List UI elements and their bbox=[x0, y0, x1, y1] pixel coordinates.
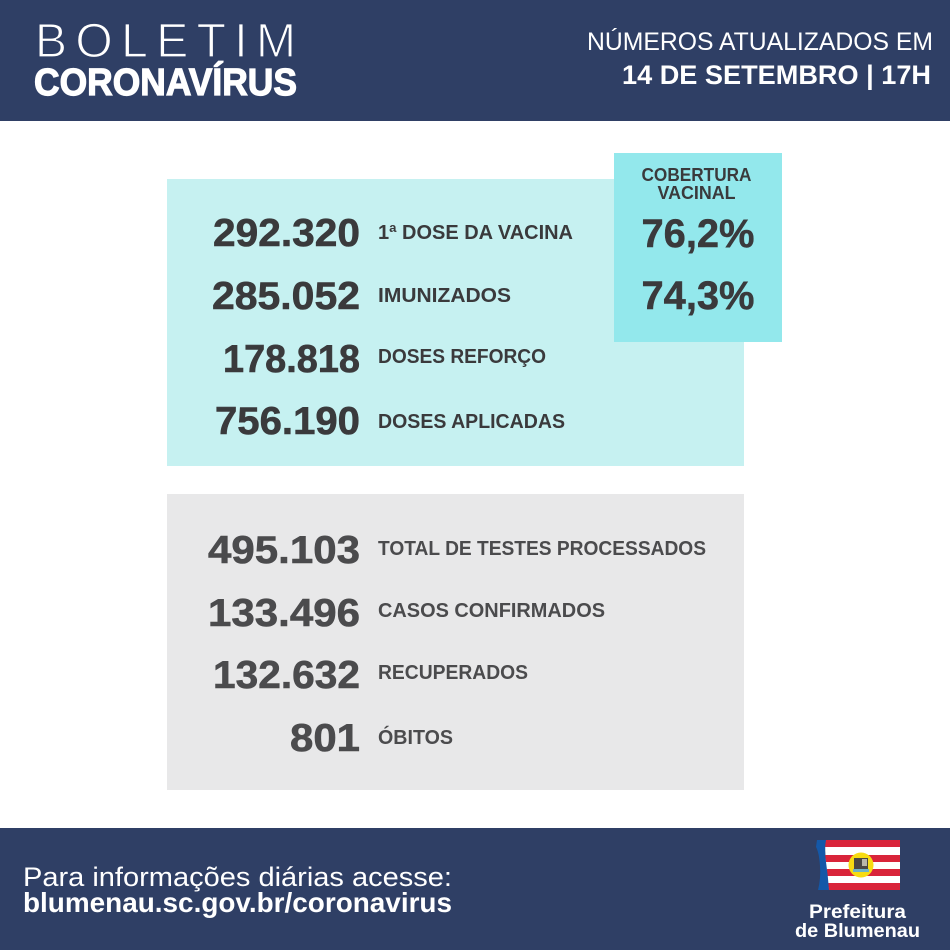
update notice: NÚMEROS ATUALIZADOS EM bbox=[587, 27, 933, 56]
stat: immunized: IMUNIZADOS bbox=[378, 285, 511, 307]
stat: booster doses bbox=[223, 338, 546, 381]
stat: deaths: ÓBITOS bbox=[378, 725, 453, 749]
stat: immunized bbox=[212, 275, 511, 318]
icon: Blumenau flag bbox=[816, 840, 900, 890]
update notice: 14 DE SETEMBRO | 17H bbox=[622, 60, 931, 90]
footer text: Para informações diárias acesse: bbox=[23, 862, 452, 892]
logo text: Prefeitura bbox=[809, 901, 906, 923]
stat: deaths: 801 bbox=[290, 717, 360, 760]
stat: deaths bbox=[290, 717, 453, 760]
coverage immunized: 74,3% bbox=[642, 274, 754, 318]
coverage first dose: 76,2% bbox=[642, 212, 754, 256]
coverage heading bbox=[642, 165, 752, 203]
stat: booster doses: DOSES REFORÇO bbox=[378, 346, 546, 368]
footer band bbox=[0, 828, 950, 950]
header band bbox=[0, 0, 950, 121]
footer text bbox=[23, 862, 452, 918]
stat: booster doses: 178.818 bbox=[223, 338, 360, 381]
stat: tests processed: TOTAL DE TESTES PROCESSADOS bbox=[378, 538, 706, 560]
stat: tests processed: 495.103 bbox=[208, 529, 360, 572]
stat: recovered: 132.632 bbox=[213, 654, 360, 697]
stat: doses applied: DOSES APLICADAS bbox=[378, 411, 565, 433]
stat: first dose bbox=[213, 212, 573, 255]
stat: confirmed cases bbox=[208, 592, 605, 635]
stat: recovered: RECUPERADOS bbox=[378, 662, 528, 684]
update notice bbox=[587, 27, 933, 90]
stat: confirmed cases: CASOS CONFIRMADOS bbox=[378, 600, 605, 622]
panel: vaccine coverage bbox=[614, 153, 782, 342]
logo text bbox=[795, 901, 920, 942]
panel: cases bbox=[167, 494, 744, 790]
stat: confirmed cases: 133.496 bbox=[208, 592, 360, 635]
stat: first dose: 292.320 bbox=[213, 212, 360, 255]
stat: recovered bbox=[213, 654, 528, 697]
stat: immunized: 285.052 bbox=[212, 275, 360, 318]
coverage heading: COBERTURA bbox=[642, 165, 752, 185]
stat: doses applied: 756.190 bbox=[215, 400, 360, 443]
logo text: de Blumenau bbox=[795, 920, 920, 942]
title: boletim: BOLETIM bbox=[35, 15, 296, 68]
stat: tests processed bbox=[208, 529, 706, 572]
panel: vaccination bbox=[167, 179, 744, 466]
coverage heading: VACINAL bbox=[658, 183, 736, 203]
stat: first dose: 1ª DOSE DA VACINA bbox=[378, 222, 573, 244]
stat: doses applied bbox=[215, 400, 565, 443]
title: coronavirus: CORONAVÍRUS bbox=[34, 60, 297, 104]
footer text: blumenau.sc.gov.br/coronavirus bbox=[23, 887, 452, 918]
